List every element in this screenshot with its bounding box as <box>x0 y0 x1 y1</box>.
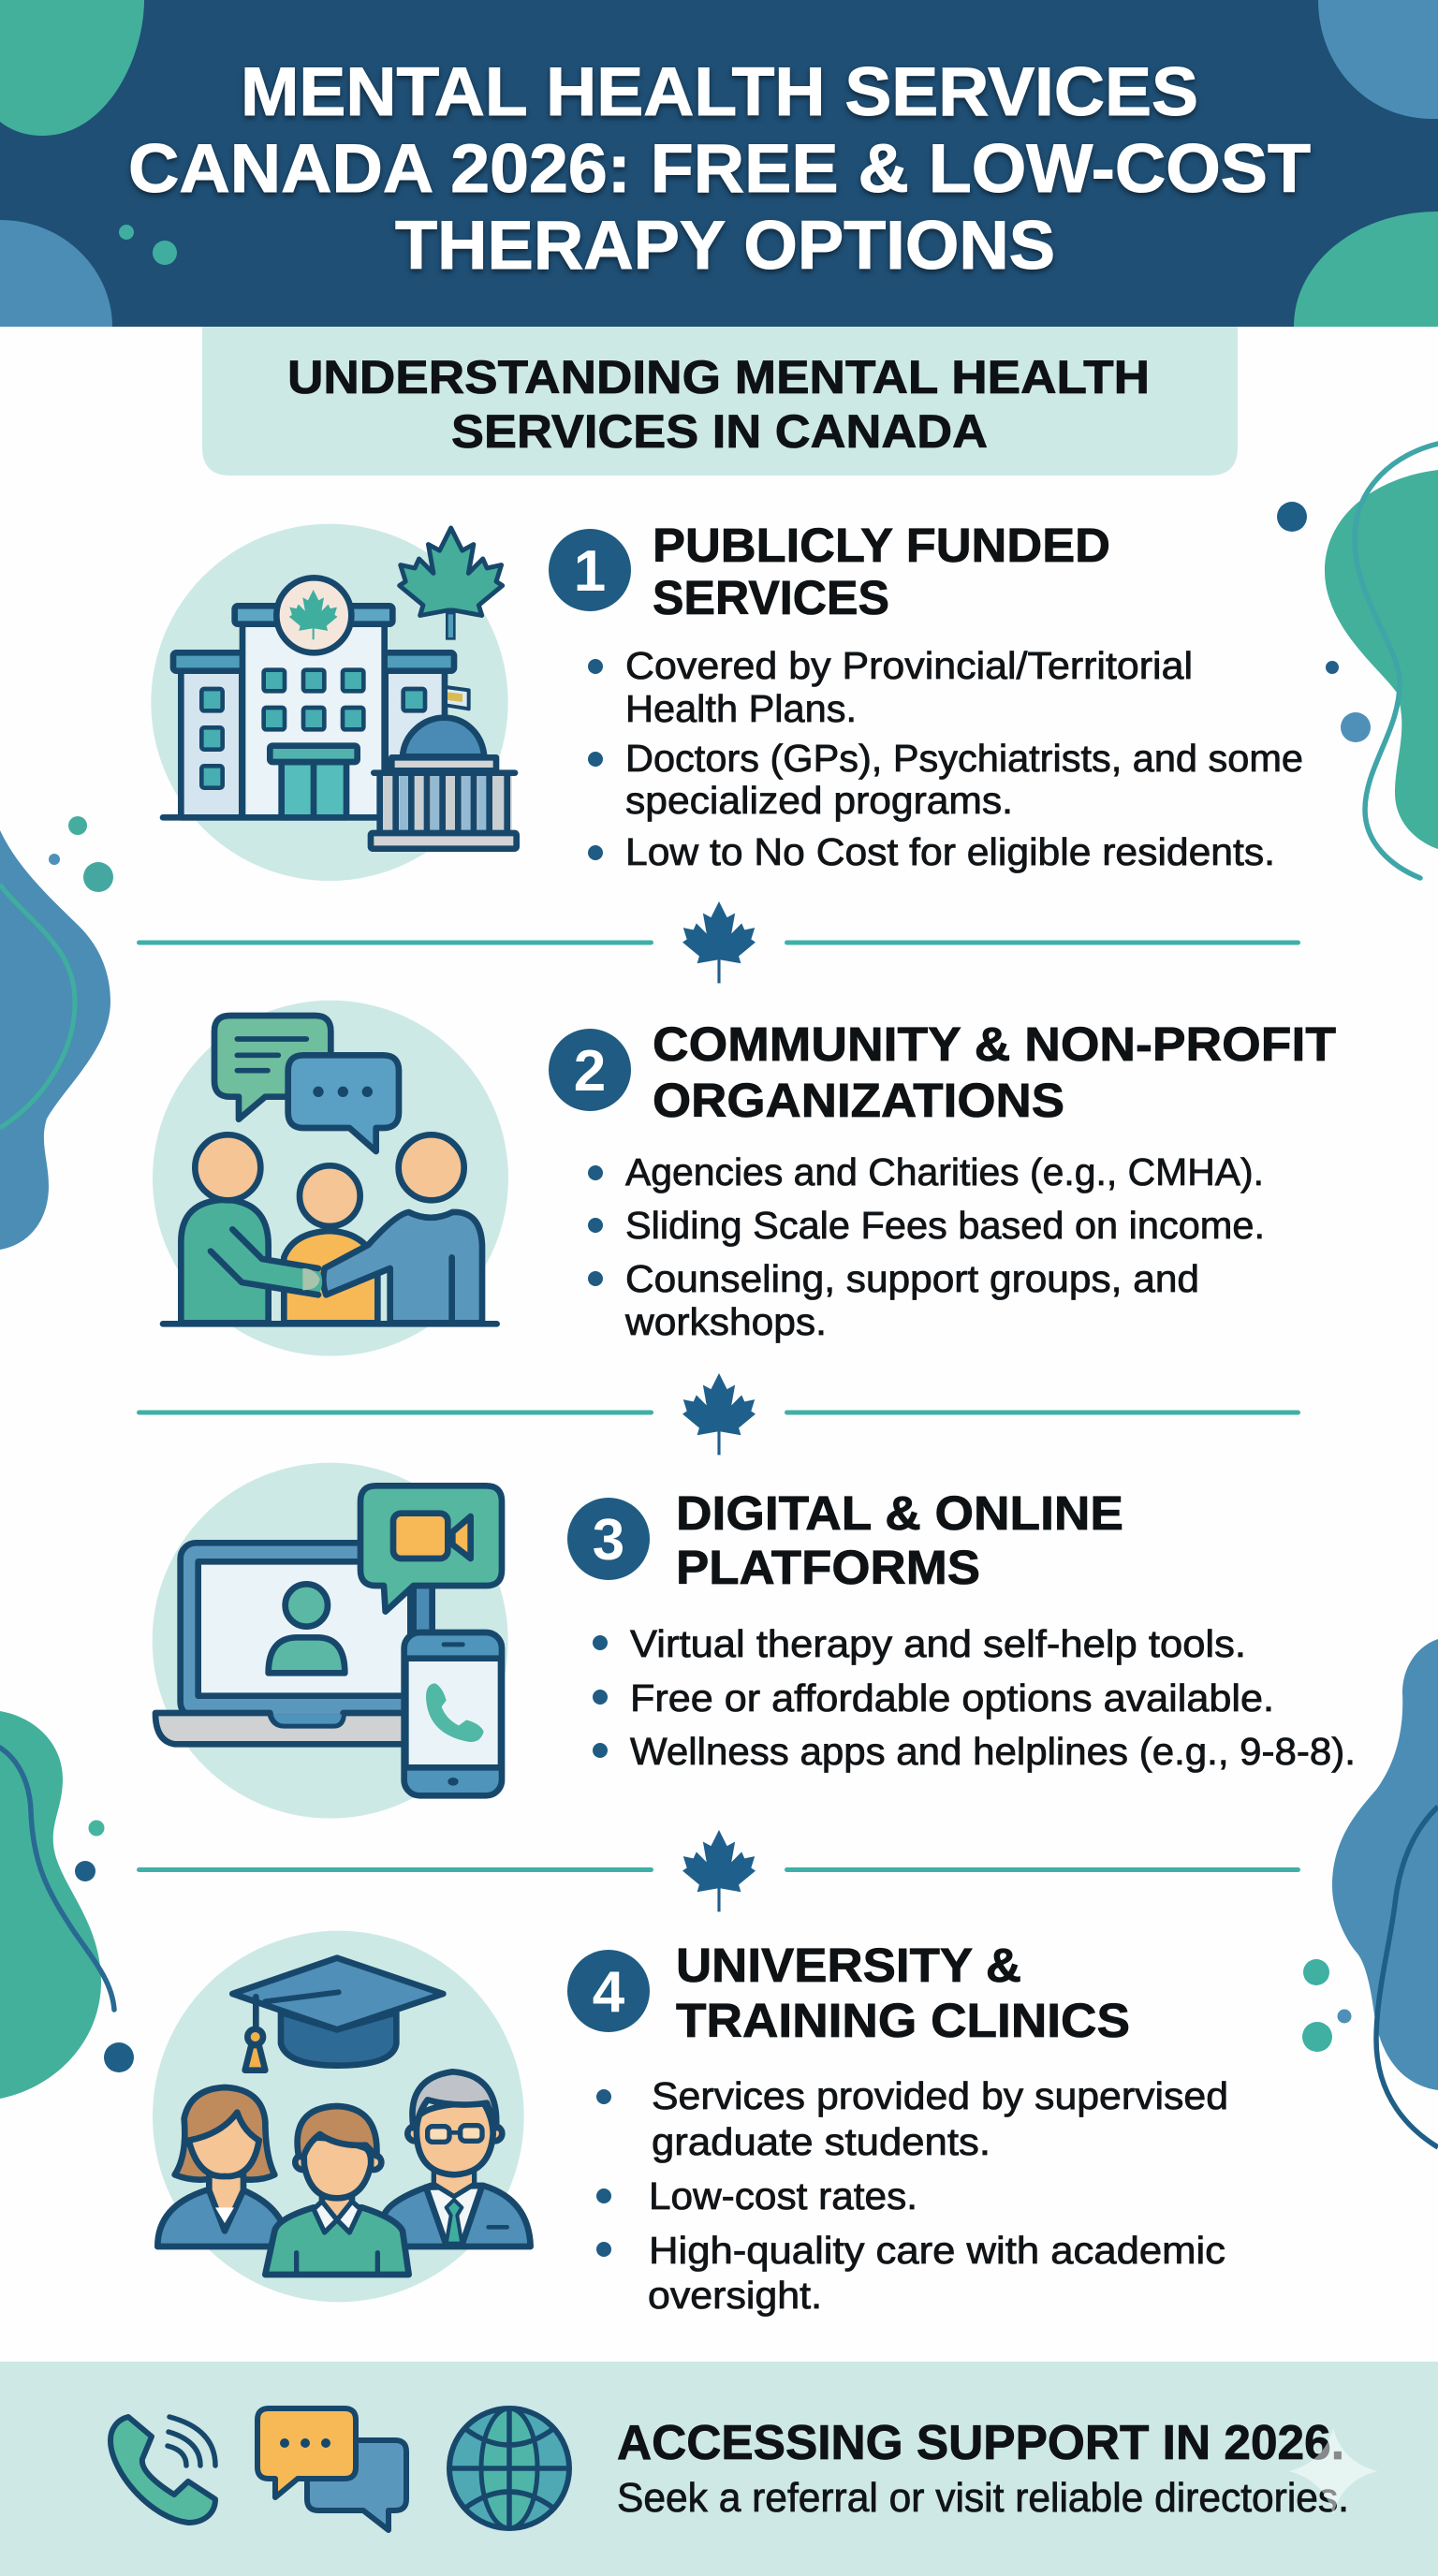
bullets 3: Wellness apps and helplines (e.g., 9-8-8). <box>630 1730 1356 1773</box>
decorative blob: lower left teal <box>0 1711 134 2099</box>
number badge 4: 4 <box>593 1960 625 2025</box>
heading 3: PLATFORMS <box>676 1541 980 1594</box>
bullets 2: Agencies and Charities (e.g., CMHA). <box>625 1150 1264 1193</box>
title: MENTAL HEALTH SERVICES <box>241 54 1198 130</box>
sparkle mark <box>1288 2427 1378 2515</box>
icon: graduation cap and people <box>153 1931 531 2302</box>
section 1 text <box>549 519 1303 873</box>
bullets 4: Low-cost rates. <box>649 2174 917 2217</box>
heading 1: SERVICES <box>653 571 889 624</box>
bullets 2: workshops. <box>624 1300 827 1343</box>
number badge 2: 2 <box>574 1039 606 1104</box>
number badge 2 <box>549 1029 631 1111</box>
bullets 2 <box>588 1150 1265 1343</box>
heading 2 <box>653 1017 1336 1127</box>
footer banner <box>0 2362 1438 2576</box>
bullets 1: Covered by Provincial/Territorial <box>625 644 1193 687</box>
title: CANADA 2026: FREE & LOW-COST <box>128 131 1311 207</box>
bullets 4: graduate students. <box>652 2120 990 2163</box>
header banner <box>0 0 1438 327</box>
subheader panel <box>202 327 1238 476</box>
bullets 1: Low to No Cost for eligible residents. <box>625 830 1275 873</box>
bullets 1: Health Plans. <box>625 687 857 730</box>
heading 2: COMMUNITY & NON-PROFIT <box>653 1017 1336 1071</box>
heading 4 <box>676 1939 1130 2047</box>
header decorative circles <box>0 0 1438 327</box>
icon: telephone <box>110 2417 215 2523</box>
heading 4: UNIVERSITY & <box>676 1939 1021 1992</box>
subheader panel: SERVICES IN CANADA <box>451 405 988 458</box>
bullets 4: Services provided by supervised <box>652 2074 1228 2117</box>
bullets 3 <box>593 1622 1356 1773</box>
bullets 4 <box>596 2074 1228 2317</box>
bullets 2: Sliding Scale Fees based on income. <box>625 1204 1265 1247</box>
footer text: Seek a referral or visit reliable directories. <box>617 2475 1349 2521</box>
number badge 1 <box>549 529 631 611</box>
section 2 text <box>549 1017 1336 1343</box>
divider 1 <box>137 901 1300 983</box>
decorative blob: upper right teal <box>1277 444 1438 878</box>
icon: community group <box>153 1001 508 1356</box>
heading 4: TRAINING CLINICS <box>676 1994 1130 2047</box>
icon: chat bubbles <box>257 2408 406 2530</box>
heading 3 <box>676 1486 1123 1594</box>
divider 2 <box>137 1373 1300 1455</box>
divider 3 <box>137 1830 1300 1911</box>
title: THERAPY OPTIONS <box>395 208 1055 284</box>
heading 2: ORGANIZATIONS <box>653 1074 1064 1127</box>
heading 1 <box>653 519 1110 624</box>
heading 1: PUBLICLY FUNDED <box>653 519 1110 572</box>
bullets 3: Virtual therapy and self-help tools. <box>630 1622 1246 1665</box>
heading 3: DIGITAL & ONLINE <box>676 1486 1123 1540</box>
number badge 3 <box>567 1498 650 1580</box>
decorative blob: lower right blue <box>1302 1639 1438 2147</box>
decorative blob: upper left blue <box>0 816 113 1250</box>
bullets 1: Doctors (GPs), Psychiatrists, and some <box>625 737 1303 780</box>
bullets 4: High-quality care with academic <box>649 2229 1225 2272</box>
footer text: ACCESSING SUPPORT IN 2026. <box>617 2416 1344 2470</box>
number badge 4 <box>567 1950 650 2032</box>
bullets 2: Counseling, support groups, and <box>625 1257 1199 1300</box>
subheader panel: UNDERSTANDING MENTAL HEALTH <box>287 351 1150 403</box>
bullets 3: Free or affordable options available. <box>630 1676 1274 1720</box>
icon: laptop and phone <box>153 1463 508 1819</box>
bullets 1 <box>588 644 1303 873</box>
section 3 text <box>567 1486 1356 1773</box>
number badge 1: 1 <box>574 539 606 604</box>
section 4 text <box>567 1939 1228 2317</box>
footer text <box>617 2416 1349 2521</box>
icon: hospital and government building <box>151 524 517 881</box>
number badge 3: 3 <box>593 1508 624 1573</box>
icon: globe <box>449 2408 569 2528</box>
bullets 4: oversight. <box>648 2274 822 2317</box>
bullets 1: specialized programs. <box>625 779 1013 822</box>
title <box>128 54 1311 284</box>
